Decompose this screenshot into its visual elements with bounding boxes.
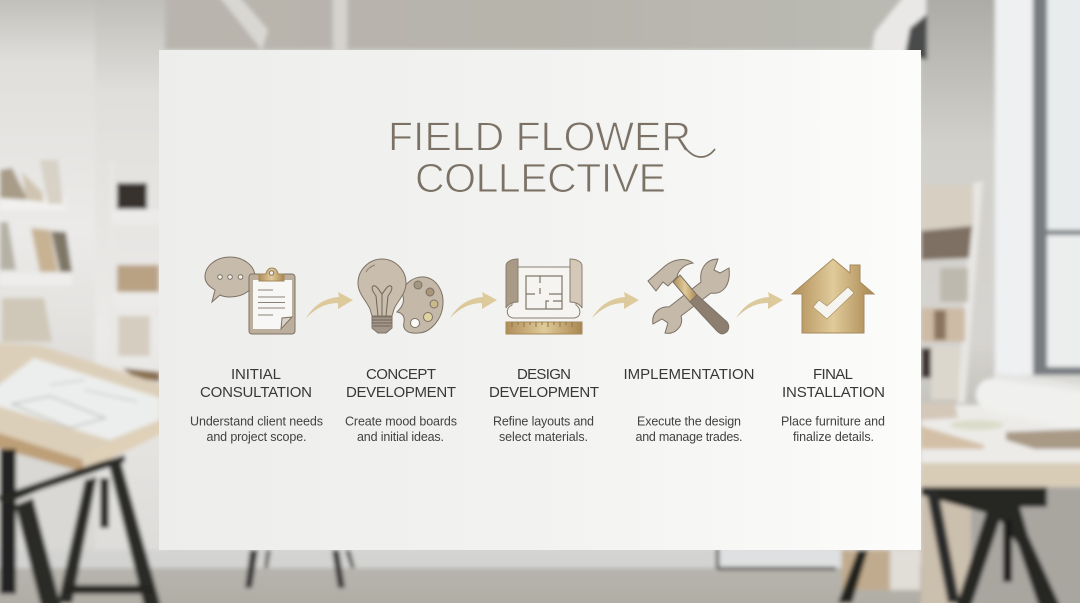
arrow 1 xyxy=(306,292,353,318)
heading line 2: DEVELOPMENT xyxy=(346,384,456,401)
step 2: concept development xyxy=(345,259,457,444)
step 4: implementation xyxy=(624,259,754,444)
description xyxy=(781,414,885,444)
description: and initial ideas. xyxy=(357,430,444,444)
left shelves xyxy=(0,196,65,210)
title: Field Flower Collective xyxy=(388,114,715,201)
step 3: design development xyxy=(489,259,599,444)
heading: concept: CONCEPT xyxy=(366,366,436,383)
description: and project scope. xyxy=(206,430,306,444)
main white panel xyxy=(159,50,921,550)
description xyxy=(493,414,594,444)
description: Place furniture and xyxy=(781,414,885,428)
heading: initial: INITIAL xyxy=(231,366,281,383)
icon: crossed hammer and wrench xyxy=(648,259,729,334)
heading: implementation: IMPLEMENTATION xyxy=(624,366,754,383)
arrow 4 xyxy=(736,292,783,318)
heading: final: FINAL xyxy=(813,366,853,383)
description: Refine layouts and xyxy=(493,414,594,428)
description xyxy=(636,414,742,444)
description: finalize details. xyxy=(793,430,874,444)
icon: speech bubble and clipboard xyxy=(205,257,295,334)
arrow 3 xyxy=(592,292,639,318)
title: Field Flower Collective: COLLECTIVE xyxy=(415,155,666,201)
right table xyxy=(921,405,1080,465)
heading line 2: CONSULTATION xyxy=(200,384,312,401)
icon: blueprint and ruler xyxy=(506,259,582,334)
description xyxy=(345,414,457,444)
description xyxy=(190,414,323,444)
description: select materials. xyxy=(499,430,588,444)
step 5: final installation xyxy=(781,259,885,444)
description: Create mood boards xyxy=(345,414,457,428)
right sample ladder xyxy=(957,181,983,403)
heading line 2: DEVELOPMENT xyxy=(489,384,599,401)
heading: design: DESIGN xyxy=(517,366,571,383)
title: Field Flower Collective: FIELD FLOWER xyxy=(388,114,691,160)
description: and manage trades. xyxy=(636,430,742,444)
arrow 2 xyxy=(450,292,497,318)
left drafting table xyxy=(0,343,165,472)
icon: house with check mark xyxy=(792,259,874,333)
icon: light bulb and palette xyxy=(358,259,443,333)
heading line 2: INSTALLATION xyxy=(782,384,885,401)
step 1: initial consultation xyxy=(190,257,323,444)
description: Understand client needs xyxy=(190,414,323,428)
description: Execute the design xyxy=(637,414,741,428)
